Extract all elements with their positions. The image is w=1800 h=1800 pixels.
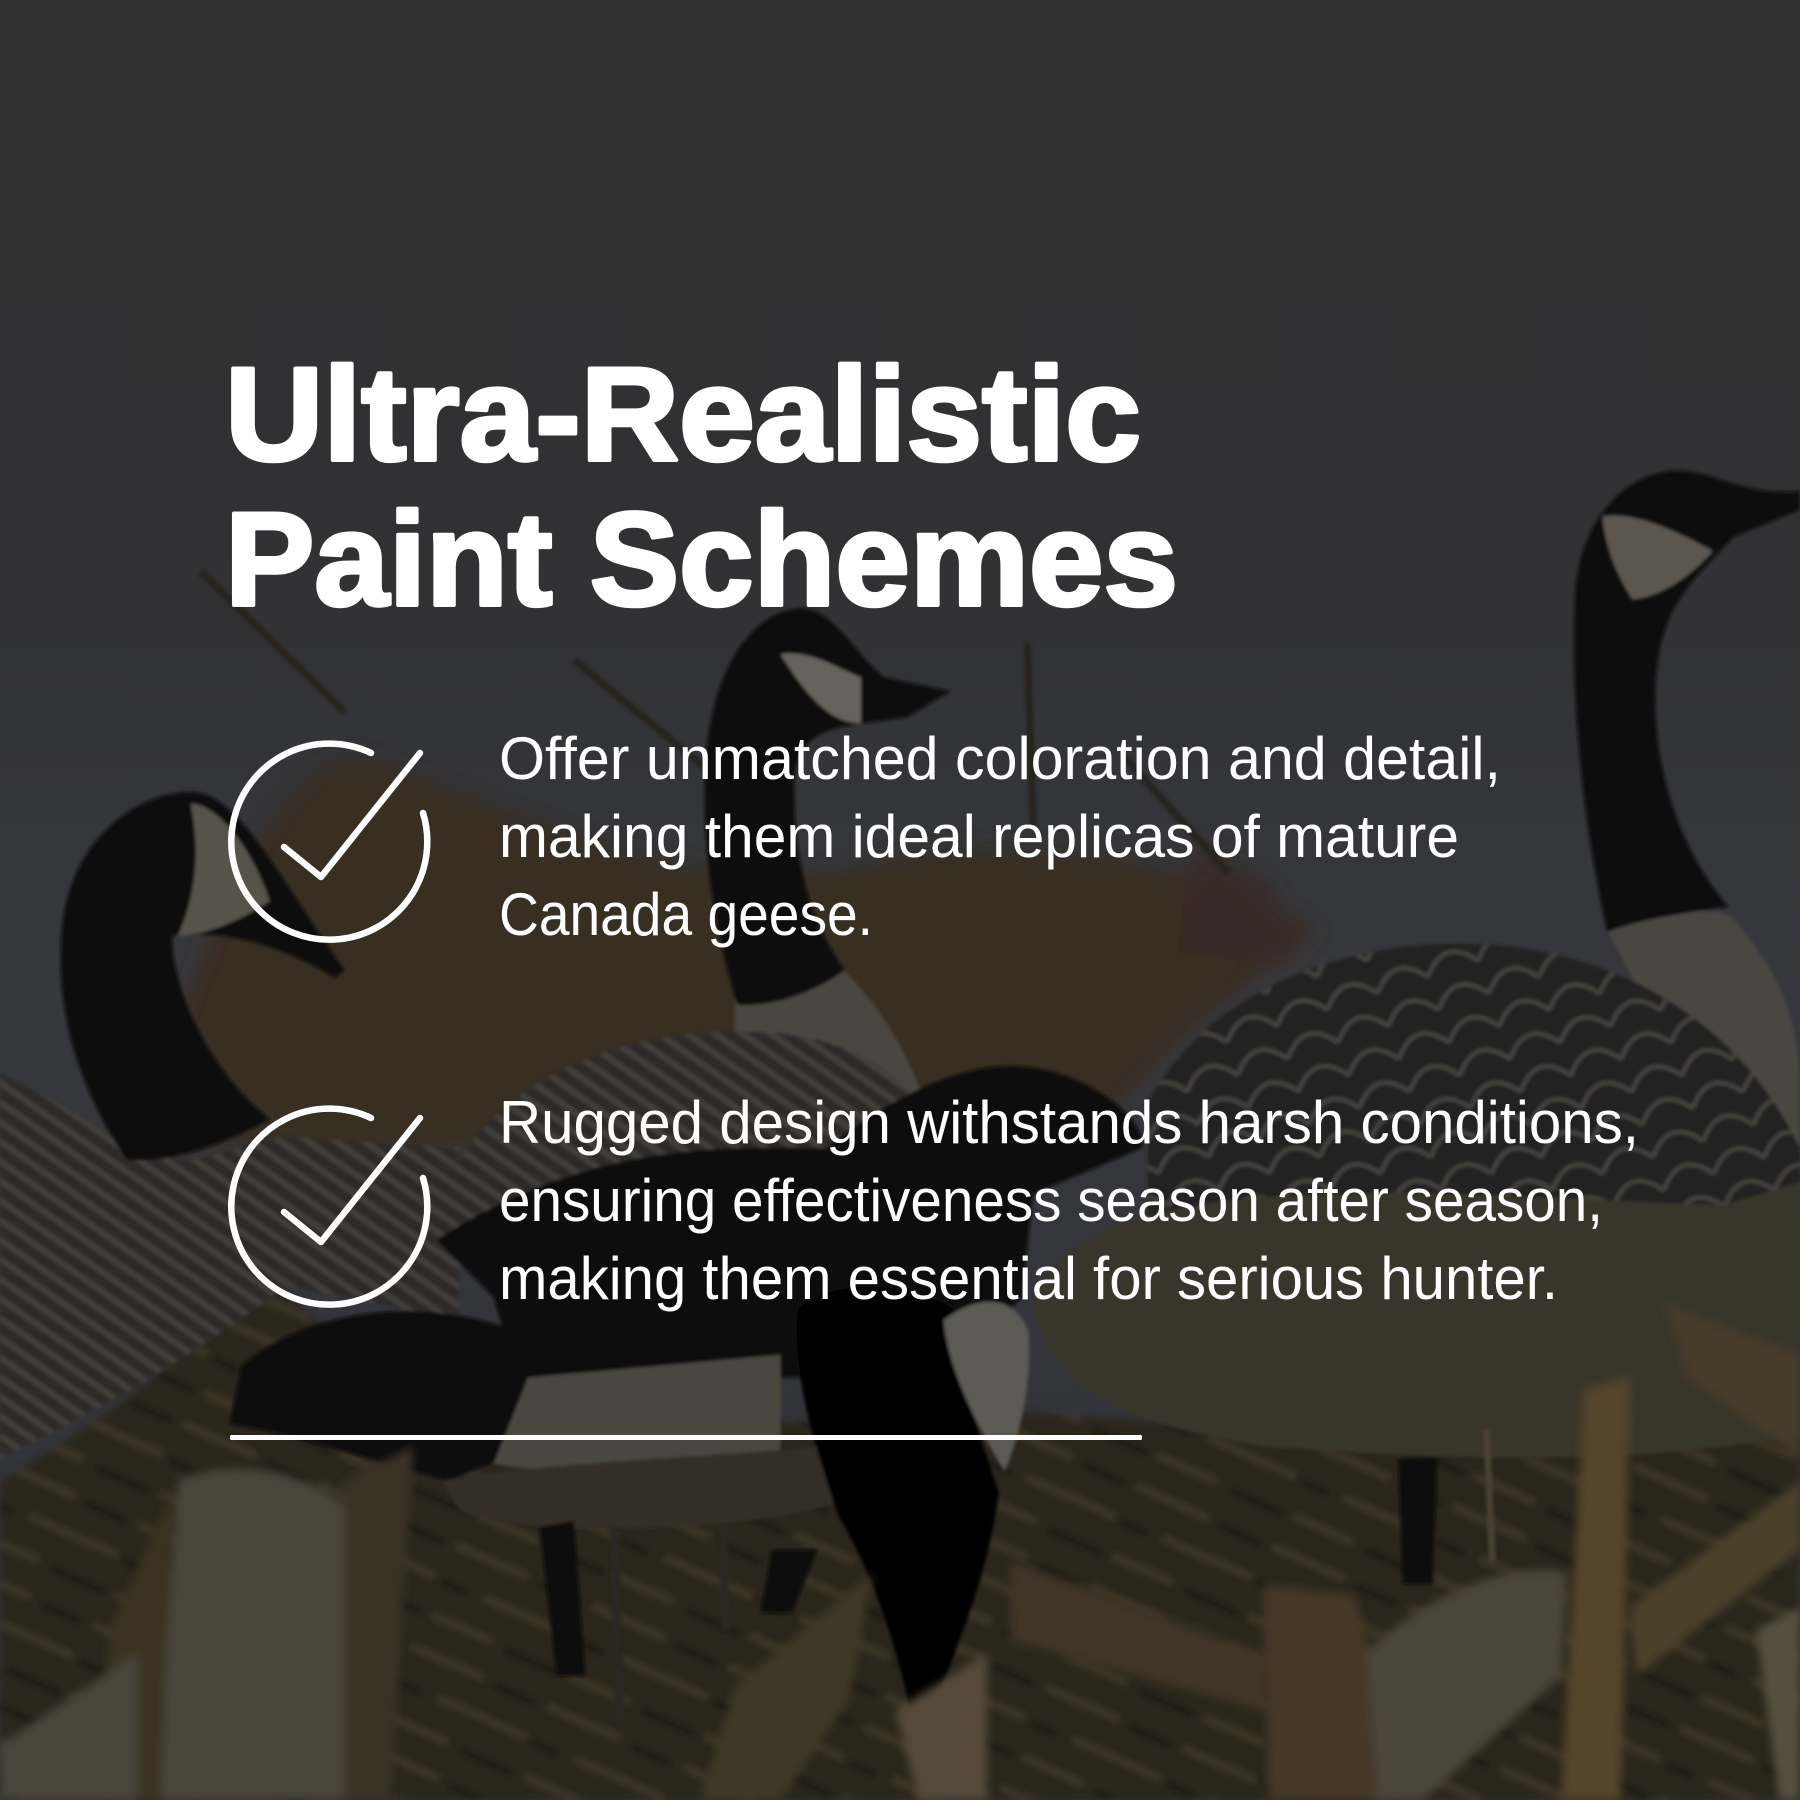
centre goose xyxy=(735,970,930,1125)
text block: rugged design: ensuring effectiveness season after season, xyxy=(499,1167,1603,1234)
icon: check circle 1 xyxy=(231,744,427,940)
icon: check circle 2 xyxy=(231,1109,427,1305)
title xyxy=(225,341,1178,634)
text block: coloration and detail: Offer unmatched coloration and detail, xyxy=(499,725,1501,792)
ground base xyxy=(0,1286,1800,1800)
text block: coloration and detail xyxy=(499,725,1501,948)
text block: rugged design xyxy=(499,1089,1639,1312)
right goose xyxy=(1607,911,1800,1217)
left goose xyxy=(0,1073,459,1458)
foreground goose xyxy=(436,1066,1143,1378)
title: Paint Schemes xyxy=(225,486,1178,634)
text block: rugged design: making them essential for serious hunter. xyxy=(499,1245,1558,1312)
foreground stalks xyxy=(0,1303,1800,1800)
text block: coloration and detail: Canada geese. xyxy=(499,881,873,948)
text block: rugged design: Rugged design withstands harsh conditions, xyxy=(499,1089,1639,1156)
text block: coloration and detail: making them ideal replicas of mature xyxy=(499,803,1459,870)
title: Ultra-Realistic xyxy=(225,341,1141,489)
divider line xyxy=(230,1435,1142,1440)
